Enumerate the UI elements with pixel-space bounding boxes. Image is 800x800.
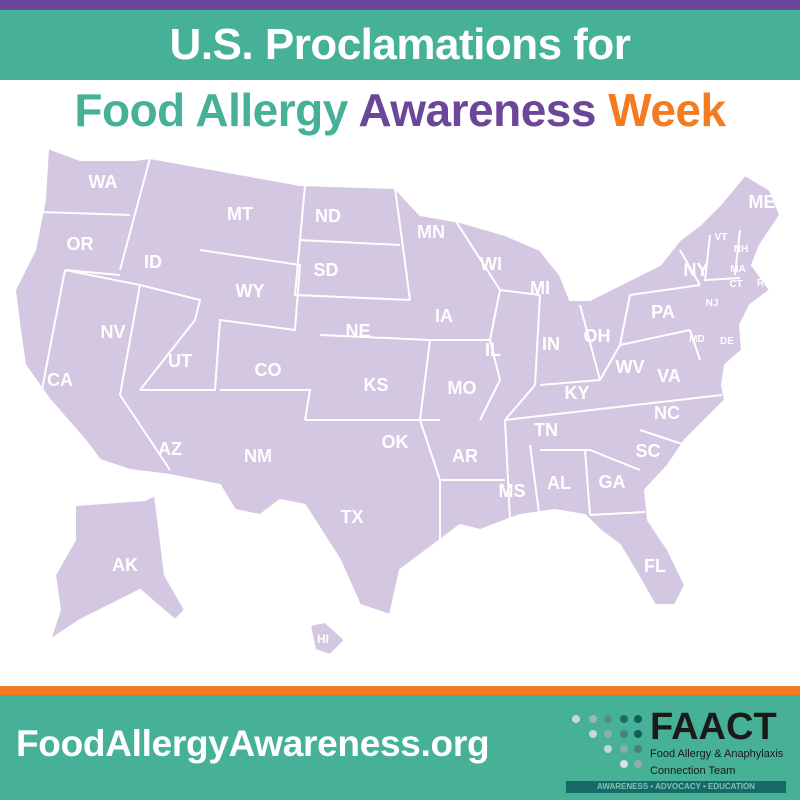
FAACT logo: AWARENESS • ADVOCACY • EDUCATION	[597, 782, 755, 791]
title banner: U.S. Proclamations for	[170, 20, 630, 69]
state labels: NH	[734, 244, 748, 255]
state labels: AK	[112, 555, 138, 575]
state labels: SC	[635, 441, 661, 461]
state labels: HI	[317, 632, 329, 646]
map: hawaii	[310, 622, 345, 655]
state labels: TN	[534, 420, 558, 440]
FAACT logo	[566, 706, 786, 793]
state labels: IA	[435, 306, 453, 326]
state labels: AZ	[158, 439, 182, 459]
state labels: OR	[66, 234, 94, 254]
state labels: NV	[100, 322, 126, 342]
state labels: AR	[452, 446, 478, 466]
state labels: DE	[720, 336, 734, 347]
state labels: OK	[382, 432, 409, 452]
state labels: IN	[542, 334, 560, 354]
state labels: ND	[315, 206, 341, 226]
state labels: MA	[730, 264, 746, 275]
state labels: PA	[651, 302, 675, 322]
map: alaska	[50, 495, 185, 640]
state labels: NC	[654, 403, 680, 423]
state labels: WY	[236, 281, 264, 301]
state labels: MD	[689, 334, 705, 345]
state labels: OH	[584, 326, 610, 346]
state labels: CA	[47, 370, 73, 390]
state labels: NJ	[706, 298, 718, 309]
footer	[0, 695, 800, 800]
top purple bar	[0, 0, 800, 10]
subtitle: Food Allergy Awareness Week	[74, 84, 726, 136]
state labels: IL	[485, 340, 501, 360]
state labels: WA	[88, 172, 118, 192]
state labels: VA	[657, 366, 681, 386]
state labels: NE	[345, 321, 371, 341]
state labels: RI	[757, 278, 767, 289]
state labels: MI	[530, 278, 550, 298]
state labels: ME	[748, 192, 776, 212]
state labels: WI	[480, 254, 502, 274]
FAACT logo: Food Allergy & Anaphylaxis	[650, 748, 783, 760]
state labels: WV	[616, 357, 644, 377]
state labels: MO	[448, 378, 476, 398]
state labels: MT	[227, 204, 253, 224]
state labels: SD	[313, 260, 339, 280]
state labels: MS	[498, 481, 526, 501]
state labels: VT	[715, 232, 727, 243]
website url: FoodAllergyAwareness.org	[16, 723, 489, 764]
state labels: ID	[144, 252, 162, 272]
state labels: LA	[455, 527, 479, 547]
state labels	[47, 172, 776, 646]
map: lower 48	[15, 148, 780, 615]
title banner	[0, 10, 800, 80]
FAACT logo: Connection Team	[650, 765, 735, 777]
state labels: GA	[598, 472, 626, 492]
state labels: TX	[340, 507, 364, 527]
orange divider	[0, 686, 800, 695]
state labels: MN	[417, 222, 445, 242]
state labels: NY	[683, 260, 709, 280]
state labels: FL	[644, 556, 666, 576]
state labels: UT	[168, 351, 192, 371]
state labels: NM	[244, 446, 272, 466]
state labels: CT	[729, 279, 743, 290]
FAACT logo: FAACT	[650, 706, 777, 748]
state labels: CO	[254, 360, 282, 380]
state labels: KS	[363, 375, 389, 395]
state labels: KY	[564, 383, 590, 403]
state labels: AL	[547, 473, 571, 493]
